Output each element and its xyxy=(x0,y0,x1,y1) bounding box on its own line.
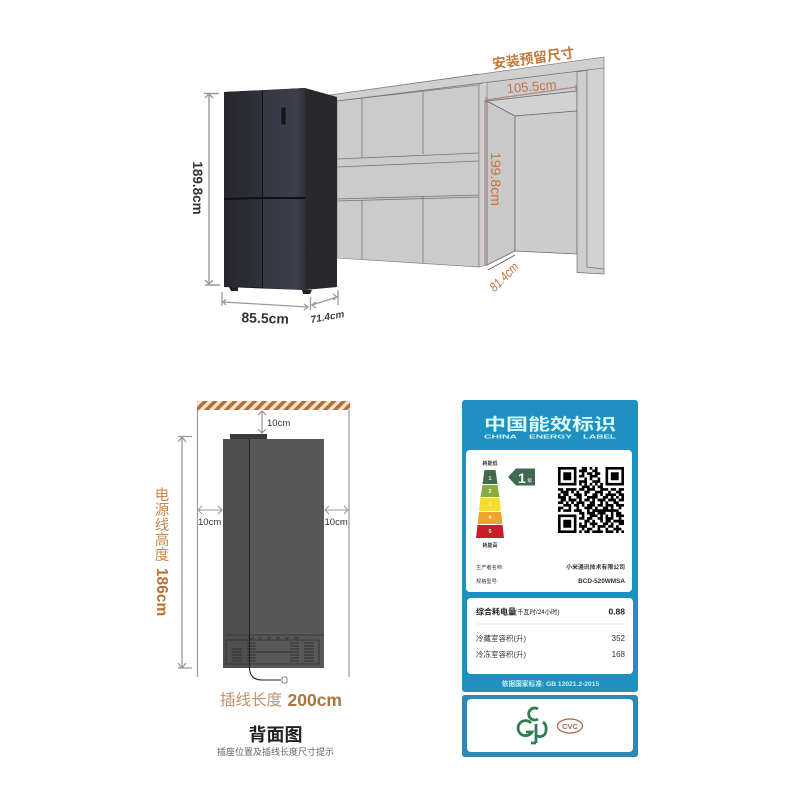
manufacturer row: 小米通讯技术有限公司 xyxy=(566,563,625,571)
dimension: right clearance 10cm xyxy=(324,506,348,528)
label: 81.4cm: 81.4cm xyxy=(486,259,522,294)
QR code xyxy=(558,468,624,532)
energy label xyxy=(462,400,638,692)
grade 1 arrow tag: 级 xyxy=(528,477,532,484)
dimension line: niche width xyxy=(486,85,576,103)
right wall end xyxy=(587,68,604,269)
standard line: 依据国家标准: GB 12021.2-2015 xyxy=(502,679,599,688)
energy grade pyramid: 2 xyxy=(488,489,492,495)
dimension line: niche depth xyxy=(488,255,515,270)
niche back wall xyxy=(515,111,577,254)
wall panel lines xyxy=(337,70,587,263)
fridge volume row: 冷藏室容积(升) xyxy=(476,633,526,643)
label subtitle: ENERGY xyxy=(529,434,573,440)
icon: CVC oval mark xyxy=(558,719,582,733)
heading: 安装预留尺寸: 安装预留尺寸 xyxy=(491,44,576,72)
label blue frame xyxy=(462,400,638,692)
rear clearance diagram xyxy=(197,401,350,683)
fridge volume row xyxy=(476,633,626,643)
wall left of the niche xyxy=(337,74,479,267)
energy grade pyramid: 3 xyxy=(488,502,492,508)
fridge feet xyxy=(229,287,312,294)
white panel: figures xyxy=(467,598,633,674)
label: cord length xyxy=(220,690,342,710)
power consumption row: 综合耗电量 xyxy=(476,606,516,616)
niche ceiling xyxy=(487,91,577,116)
fridge lower left door xyxy=(224,199,262,288)
energy grade pyramid: 4 xyxy=(488,515,492,521)
caption: high consumption: 耗能高 xyxy=(482,542,498,549)
dimension: fridge depth xyxy=(310,290,345,326)
vertical label: power cord height: 度 xyxy=(155,547,169,564)
fridge rear body xyxy=(223,439,324,668)
dimension: fridge depth: 71.4cm xyxy=(310,309,345,326)
grade 1 arrow tag: 1 xyxy=(518,470,526,486)
model row: 规格型号: xyxy=(476,577,498,585)
energy grade pyramid: 1 xyxy=(488,476,492,482)
installation niche drawing xyxy=(330,57,604,274)
freezer volume row xyxy=(476,649,626,659)
dimension: left clearance 10cm xyxy=(198,506,222,528)
dimension: cord height arrow xyxy=(178,436,192,668)
vertical label: power cord height: 186cm xyxy=(153,568,170,616)
dimension: right clearance 10cm: 10cm xyxy=(324,517,348,528)
label: 199.8cm: 199.8cm xyxy=(488,152,504,206)
dimension line: niche height xyxy=(484,100,486,266)
fridge display panel xyxy=(281,107,286,125)
model row: BCD-520WMSA xyxy=(578,578,625,585)
fridge upper right door xyxy=(263,88,305,197)
power cord and plug xyxy=(250,439,281,680)
dimension: fridge height: 189.8cm xyxy=(190,161,205,215)
side clearance guide lines xyxy=(198,410,349,677)
label subtitle xyxy=(484,434,617,440)
fridge dark backing xyxy=(224,88,305,290)
vertical label: power cord height: 线 xyxy=(155,517,169,534)
caption: low consumption: 耗能低 xyxy=(482,460,498,467)
freezer volume row: 冷冻室容积(升) xyxy=(476,649,526,659)
manufacturer row: 生产者名称: xyxy=(476,563,503,571)
icon: green CGP tree mark xyxy=(518,708,546,743)
caption: rear view: 插座位置及插线长度尺寸提示 xyxy=(217,746,334,757)
fridge volume row: 352 xyxy=(612,634,626,643)
grade 1 arrow tag xyxy=(508,468,535,486)
dimension: top clearance 10cm: 10cm xyxy=(267,418,290,429)
hatched wall above xyxy=(197,401,350,410)
white inner panel xyxy=(467,699,633,752)
dimension: fridge width xyxy=(222,292,308,327)
vertical label: power cord height xyxy=(153,487,170,616)
label: cord length: 200cm xyxy=(288,690,342,710)
dimension: left clearance 10cm: 10cm xyxy=(198,517,221,528)
certification panel xyxy=(462,695,638,757)
right jamb xyxy=(577,70,604,274)
fridge side panel xyxy=(305,88,337,290)
label: 105.5cm: 105.5cm xyxy=(506,77,557,96)
label subtitle: CHINA xyxy=(484,434,517,440)
compressor vent xyxy=(225,635,324,664)
divider xyxy=(476,623,624,625)
freezer volume row: 168 xyxy=(612,650,626,659)
fridge rear top vent xyxy=(230,434,267,440)
title: rear view: 背面图 xyxy=(248,725,302,745)
manufacturer row xyxy=(476,563,625,571)
dimension: fridge height xyxy=(190,94,220,285)
power consumption row xyxy=(476,606,625,616)
fridge upper left door xyxy=(224,90,262,198)
fridge lower right door xyxy=(263,199,305,290)
wall top band xyxy=(330,57,604,101)
niche left jamb xyxy=(479,82,487,267)
vertical label: power cord height: 电 xyxy=(155,487,169,504)
niche side wall xyxy=(487,101,515,265)
fridge front view xyxy=(224,88,337,294)
label title: 中国能效标识 xyxy=(484,416,616,434)
energy grade pyramid xyxy=(476,470,504,538)
blue frame xyxy=(462,695,638,757)
energy grade pyramid: 5 xyxy=(488,529,492,535)
label: cord length: 插线长度 xyxy=(220,691,282,709)
rear body shading xyxy=(223,439,250,668)
vertical label: power cord height: 高 xyxy=(155,532,169,549)
wall above the niche xyxy=(479,70,587,101)
power consumption row: (千瓦时/24小时) xyxy=(515,607,559,616)
vertical label: power cord height: 源 xyxy=(155,502,170,519)
model row xyxy=(476,577,625,585)
icon: CVC oval mark: CVC xyxy=(562,722,578,731)
power consumption row: 0.88 xyxy=(608,606,625,616)
dimension: fridge width: 85.5cm xyxy=(241,309,289,327)
dimension: top clearance 10cm xyxy=(258,411,290,433)
label subtitle: LABEL xyxy=(583,434,617,440)
white panel: grade and QR xyxy=(466,450,632,592)
